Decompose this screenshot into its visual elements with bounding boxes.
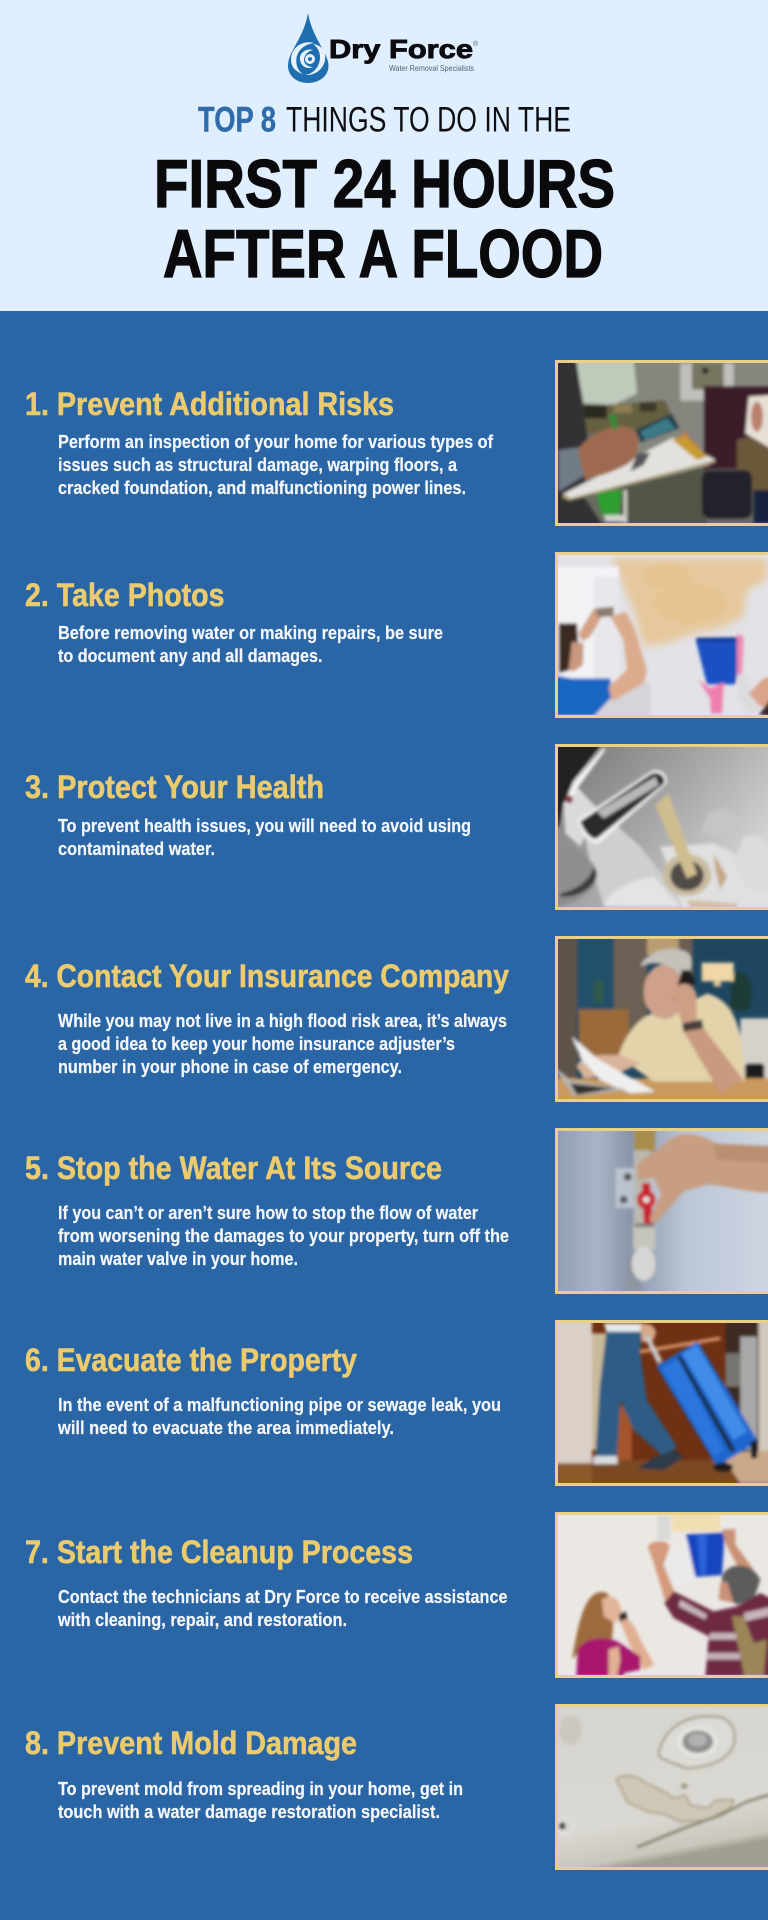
body text (58, 816, 471, 859)
photo: couple catching ceiling leak with bucket (554, 1510, 768, 1680)
body text (58, 1011, 507, 1077)
body text (57, 1395, 501, 1438)
header panel background (0, 0, 768, 311)
body text: contaminated water. (58, 839, 215, 859)
body text: In the event of a malfunctioning pipe or sewage leak, you (58, 1395, 501, 1415)
body text: will need to evacuate the area immediately. (57, 1418, 394, 1438)
body text (58, 623, 443, 666)
panel: step 8 prevent mold damage (25, 1703, 768, 1870)
heading: 6. Evacuate the Property (25, 1342, 357, 1378)
heading: 5. Stop the Water At Its Source (25, 1150, 442, 1186)
heading: 2. Take Photos (25, 577, 224, 613)
photo: person leaving with blue suitcase (554, 1320, 768, 1487)
body text: from worsening the damages to your property, turn off the (58, 1226, 509, 1246)
photo: hand turning water valve (554, 1126, 768, 1296)
body text: number in your phone in case of emergency. (58, 1057, 402, 1077)
panel: step 1 prevent additional risks (25, 360, 768, 527)
logo: Dry Force (288, 13, 479, 83)
body text: Contact the technicians at Dry Force to receive assistance (58, 1587, 508, 1607)
body text: issues such as structural damage, warping floors, a (58, 455, 458, 475)
subtitle: top 8 things (198, 100, 571, 140)
title: FIRST 24 HOURS (154, 146, 615, 222)
body text: main water valve in your home. (58, 1249, 298, 1269)
logo wordmark: Dry Force (329, 34, 473, 64)
body text: cracked foundation, and malfunctioning power lines. (58, 478, 466, 498)
body text: Before removing water or making repairs, be sure (58, 623, 443, 643)
body text (58, 1203, 509, 1269)
subtitle: top 8 things: THINGS TO DO IN THE (286, 100, 571, 140)
body text (58, 432, 494, 498)
registered mark: ® (473, 40, 479, 48)
body text: to document any and all damages. (58, 646, 322, 666)
panel: step 5 stop the water at its source (25, 1126, 768, 1296)
body text: To prevent health issues, you will need to avoid using (58, 816, 471, 836)
heading: 1. Prevent Additional Risks (25, 386, 394, 422)
photo: brown water from faucet (554, 743, 768, 910)
body text: touch with a water damage restoration specialist. (58, 1802, 440, 1822)
title: AFTER A FLOOD (163, 216, 603, 292)
panel: step 7 start the cleanup process (25, 1510, 768, 1680)
photo: man on the phone with paperwork (554, 935, 768, 1102)
body text: Perform an inspection of your home for various types of (58, 432, 494, 452)
body text: To prevent mold from spreading in your home, get in (58, 1779, 463, 1799)
icon: water drop with swirl (288, 13, 328, 83)
body text (57, 1587, 507, 1630)
body text: If you can’t or aren’t sure how to stop the flow of water (58, 1203, 478, 1223)
heading: 3. Protect Your Health (25, 769, 324, 805)
panel: step 3 protect your health (25, 743, 768, 910)
subtitle: top 8 things: TOP 8 (198, 100, 276, 140)
heading: 7. Start the Cleanup Process (25, 1534, 413, 1570)
body text: with cleaning, repair, and restoration. (57, 1610, 347, 1630)
panel: step 6 evacuate the property (25, 1320, 768, 1487)
title (154, 146, 615, 292)
photo: inspector with clipboard (554, 360, 768, 527)
heading: 4. Contact Your Insurance Company (25, 958, 509, 994)
logo tagline: Water Removal Specialists (389, 63, 474, 73)
body text: a good idea to keep your home insurance adjuster’s (58, 1034, 455, 1054)
photo: mold and water stains on ceiling (554, 1703, 768, 1870)
panel: step 2 take photos (25, 550, 768, 720)
heading: 8. Prevent Mold Damage (25, 1725, 357, 1761)
photo: man photographing water stain (554, 550, 768, 720)
panel: step 4 contact your insurance company (25, 935, 768, 1102)
body text: While you may not live in a high flood risk area, it’s always (58, 1011, 507, 1031)
body text (58, 1779, 463, 1822)
